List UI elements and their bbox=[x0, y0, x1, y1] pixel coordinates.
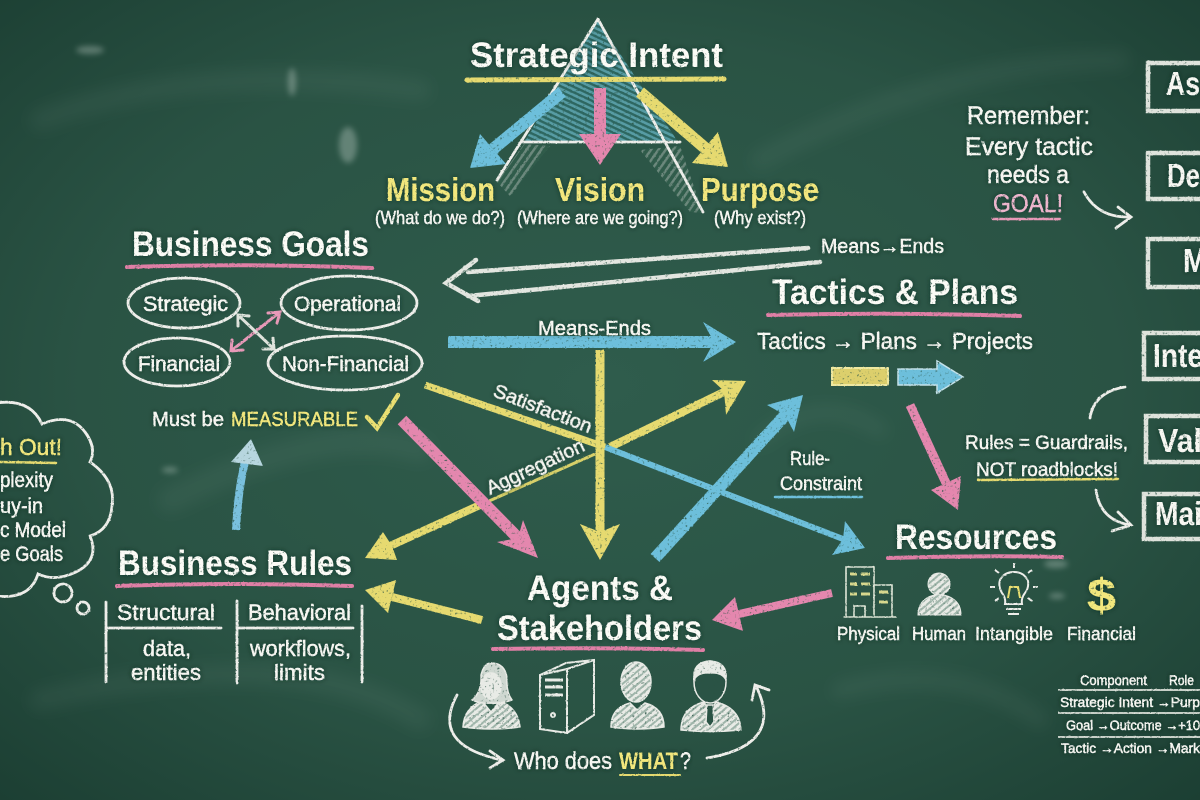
icon: yellow bar bbox=[832, 368, 888, 385]
icon: person bust bbox=[918, 573, 961, 615]
icon: check mark bbox=[367, 395, 398, 428]
arrow: curve down to box bbox=[1096, 490, 1131, 531]
panel: business rules bbox=[106, 544, 362, 685]
table: rule types: data, bbox=[143, 636, 191, 661]
labels: resource types: Financial bbox=[1067, 624, 1136, 644]
arrow: aggregation to tactics bbox=[610, 380, 746, 447]
callout: remember note bbox=[965, 102, 1131, 228]
arrow: pink resources to agents bbox=[712, 593, 832, 631]
oval: Strategic: Strategic bbox=[143, 293, 228, 316]
box: Inte bbox=[1144, 333, 1200, 379]
icon: computer tower bbox=[540, 660, 594, 733]
table: component role summary: Strategic Intent →Purp bbox=[1060, 694, 1200, 710]
label: Mission: (What do we do?) bbox=[375, 208, 505, 228]
oval: Financial bbox=[124, 338, 230, 386]
text: must be measurable: Must be bbox=[152, 409, 224, 431]
text: who does what: Who does bbox=[514, 748, 612, 775]
arrow: rules to goals bbox=[231, 439, 263, 530]
label: rule-constraint: Rule- bbox=[790, 449, 830, 470]
heading: Business Rules: Business Rules bbox=[118, 544, 352, 583]
table: rule types: Behavioral bbox=[248, 600, 351, 625]
arrow: to Vision bbox=[579, 88, 621, 165]
text: must be measurable: MEASURABLE bbox=[231, 409, 358, 431]
icon: thought cloud bbox=[0, 402, 113, 597]
box: Val bbox=[1146, 416, 1200, 462]
text: must be measurable bbox=[152, 409, 358, 431]
table: component role summary: Role bbox=[1169, 672, 1194, 688]
callout: remember note: GOAL! bbox=[993, 190, 1063, 218]
text: who does what: ? bbox=[680, 748, 691, 775]
table: rule types: workflows, bbox=[249, 636, 351, 661]
oval: Non-Financial: Non-Financial bbox=[282, 353, 409, 376]
callout: watch out cloud bbox=[0, 402, 113, 614]
label: Vision: Vision bbox=[555, 171, 645, 208]
arrow: to Purpose bbox=[640, 92, 728, 167]
arrow: curve up to box bbox=[1090, 387, 1125, 418]
panel: agents and stakeholders bbox=[450, 569, 769, 775]
labels: resource types: Physical bbox=[837, 624, 900, 644]
callout: remember note: needs a bbox=[987, 161, 1069, 189]
icon: chalk triangle bbox=[497, 19, 703, 213]
arrow: pink to agents bbox=[402, 420, 538, 558]
arrow: yellow agents to rules bbox=[365, 580, 482, 620]
callout: guardrails note: NOT roadblocks! bbox=[976, 460, 1118, 481]
heading: Agents & Stakeholders bbox=[497, 569, 702, 648]
arrow: means to ends bbox=[446, 236, 944, 301]
heading: Strategic Intent: Strategic Intent bbox=[470, 36, 723, 75]
panel: clipped boxes on the right edge bbox=[1144, 63, 1200, 539]
arrow: means-ends link bbox=[448, 322, 736, 362]
label: Means-Ends: Means-Ends bbox=[538, 318, 651, 340]
icon: light bulb bbox=[990, 563, 1038, 614]
table: rule types bbox=[106, 600, 362, 685]
label: Mission bbox=[375, 171, 505, 228]
arrow: yellow down to agents bbox=[580, 350, 620, 560]
arrows: between goal types bbox=[231, 312, 280, 351]
arrow: means to ends: Means→Ends bbox=[821, 236, 944, 258]
label: Purpose bbox=[701, 171, 819, 228]
table: rule types: limits bbox=[274, 660, 325, 685]
heading: Business Goals: Business Goals bbox=[132, 225, 369, 264]
label: Purpose: Purpose bbox=[701, 171, 819, 208]
oval: Financial: Financial bbox=[138, 353, 220, 376]
icon: woman bbox=[463, 663, 520, 729]
arrow: remember curve bbox=[1084, 192, 1131, 228]
callout: watch out cloud: e Goals bbox=[0, 543, 63, 566]
arrow: aggregation to rules bbox=[365, 450, 604, 560]
label: Vision bbox=[517, 171, 683, 228]
table: component role summary bbox=[1058, 672, 1200, 756]
callout: watch out cloud: plexity bbox=[0, 469, 53, 492]
label: Purpose: (Why exist?) bbox=[714, 208, 806, 228]
heading: Agents & Stakeholders: Agents & bbox=[527, 569, 673, 608]
heading: Tactics & Plans: Tactics & Plans bbox=[772, 273, 1018, 312]
label: Satisfaction: Satisfaction bbox=[490, 381, 595, 438]
labels: resource types bbox=[837, 624, 1136, 644]
callout: watch out cloud: h Out! bbox=[0, 434, 62, 460]
box: M bbox=[1148, 239, 1200, 287]
box: De bbox=[1148, 153, 1200, 199]
callout: guardrails note bbox=[965, 387, 1131, 531]
icon: dollar sign: $ bbox=[1087, 569, 1116, 621]
table: rule types: entities bbox=[131, 660, 201, 685]
table: rule types: Structural bbox=[117, 600, 215, 625]
table: component role summary: Tactic →Action →Mark bbox=[1061, 740, 1200, 756]
icon: person bbox=[611, 662, 664, 729]
panel: business goals bbox=[124, 225, 422, 431]
box: Mai bbox=[1144, 494, 1200, 539]
oval: Operational: Operational bbox=[294, 293, 401, 316]
heading: Agents & Stakeholders: Stakeholders bbox=[497, 609, 702, 648]
arrow: cycle right bbox=[707, 685, 769, 758]
arrow: satisfaction line bbox=[425, 385, 865, 555]
arrow: pink tactics to resources bbox=[910, 405, 961, 510]
panel: strategic intent triangle bbox=[375, 19, 819, 228]
icon: building bbox=[843, 567, 896, 617]
text: tactics flow: Tactics → Plans → Projects bbox=[757, 328, 1033, 354]
callout: guardrails note: Rules = Guardrails, bbox=[965, 433, 1128, 454]
callout: remember note: Remember: bbox=[967, 102, 1090, 130]
box: As bbox=[1148, 63, 1200, 111]
label: Mission: Mission bbox=[386, 171, 495, 208]
labels: resource types: Human bbox=[912, 624, 966, 644]
heading: Resources: Resources bbox=[895, 518, 1057, 557]
icon: thought bubbles bbox=[54, 584, 89, 614]
label: Vision: (Where are we going?) bbox=[517, 208, 683, 228]
callout: watch out cloud: c Model bbox=[0, 519, 66, 542]
text: who does what: WHAT bbox=[619, 748, 678, 775]
labels: resource types: Intangible bbox=[975, 624, 1053, 644]
icon: blue block arrow bbox=[898, 361, 963, 393]
callout: watch out cloud: uy-in bbox=[0, 495, 43, 518]
icon: man in suit bbox=[681, 661, 741, 732]
callout: remember note: Every tactic bbox=[965, 133, 1093, 161]
table: component role summary: Component bbox=[1080, 672, 1147, 688]
arrow: blue to tactics bbox=[655, 395, 803, 558]
label: Aggregation: Aggregation bbox=[483, 436, 588, 500]
oval: Strategic bbox=[128, 278, 240, 328]
panel: resources bbox=[837, 518, 1136, 644]
label: rule-constraint: Constraint bbox=[780, 474, 863, 495]
panel: tactics and plans bbox=[757, 273, 1033, 393]
text: who does what bbox=[514, 748, 691, 775]
arrow: cycle left bbox=[450, 695, 503, 768]
oval: Operational bbox=[281, 276, 417, 330]
arrow: to Mission bbox=[470, 92, 562, 168]
oval: Non-Financial bbox=[268, 336, 422, 390]
label: rule-constraint bbox=[775, 449, 863, 497]
